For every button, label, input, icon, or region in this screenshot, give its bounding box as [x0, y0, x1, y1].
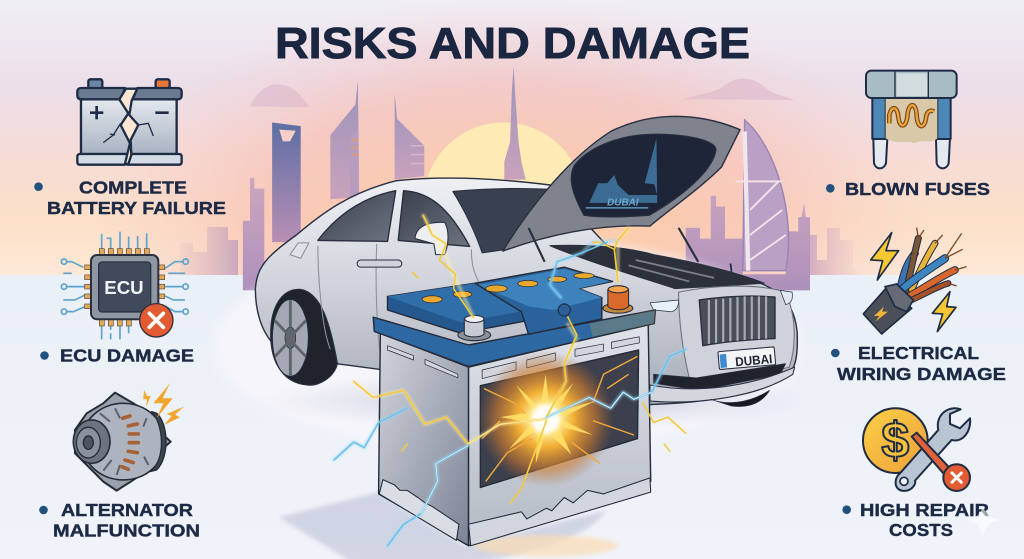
lower intake — [654, 364, 786, 390]
number plate — [718, 347, 776, 370]
clamp — [558, 304, 570, 316]
error badge — [140, 304, 173, 337]
number plate: DUBAI — [735, 351, 773, 369]
explosion burst — [478, 351, 638, 487]
cooling fins — [90, 408, 148, 475]
low skyline — [243, 178, 810, 290]
label: ELECTRICAL — [858, 343, 979, 363]
negative terminal — [458, 315, 491, 341]
wrench — [896, 408, 970, 491]
grille — [699, 296, 775, 346]
label — [47, 178, 226, 218]
item: alternator malfunction — [39, 383, 200, 541]
fuel flap — [290, 243, 309, 258]
label: BATTERY FAILURE — [47, 198, 226, 218]
pale ground glow — [214, 239, 800, 453]
engine bay — [550, 245, 764, 289]
left column — [34, 79, 226, 541]
exploding car battery — [373, 267, 655, 546]
battery plus and minus signs — [90, 106, 169, 119]
label: WIRING DAMAGE — [837, 364, 1006, 384]
white-blue arcs — [334, 242, 686, 546]
label: COSTS — [889, 520, 953, 540]
open bonnet — [503, 116, 740, 283]
item: high repair costs — [842, 408, 989, 540]
label: COMPLETE — [79, 178, 187, 198]
error badge — [943, 464, 970, 491]
burnt filament — [889, 105, 934, 126]
red handle — [912, 433, 950, 473]
Dubai skyline — [243, 66, 810, 290]
distant skyline right — [800, 203, 862, 275]
label: MALFUNCTION — [53, 521, 200, 541]
wires — [900, 238, 955, 300]
watermark sparkle — [966, 505, 1000, 536]
lightning bolts — [871, 233, 956, 332]
positive terminal — [603, 286, 633, 313]
label: BLOWN FUSES — [845, 179, 990, 199]
crack gap — [119, 89, 138, 164]
label: ALTERNATOR — [61, 500, 193, 520]
lid right block — [475, 267, 613, 334]
battery ground shadow — [279, 492, 607, 559]
bonnet emblem — [586, 139, 657, 209]
icon: coin, wrench and cross — [863, 408, 970, 491]
label — [860, 500, 989, 540]
item: ECU damage — [40, 232, 194, 366]
bullet — [34, 182, 43, 191]
bullet — [826, 184, 835, 193]
yellow arcs — [354, 215, 686, 503]
arc glow — [354, 215, 629, 444]
label: HIGH REPAIR — [860, 500, 989, 520]
car body — [255, 178, 797, 405]
radiator surround — [679, 286, 794, 379]
Burj Khalifa — [504, 66, 526, 180]
distant skyline left — [180, 227, 238, 275]
item: complete battery failure — [34, 79, 226, 218]
rear tyre and arch — [271, 289, 338, 385]
windscreen — [453, 189, 550, 253]
clouds — [250, 79, 795, 107]
bonnet struts — [529, 228, 698, 262]
icon: cracked battery — [77, 79, 182, 165]
icon: ECU chip — [61, 232, 188, 339]
wing mirror — [415, 222, 448, 255]
door handle — [357, 260, 402, 267]
skyscraper with aperture — [272, 123, 301, 242]
bonnet emblem: DUBAI — [607, 198, 639, 209]
car ground shadow — [257, 371, 814, 431]
background: sunset sky — [0, 0, 1024, 276]
label: ECU DAMAGE — [60, 346, 194, 366]
item: blown fuses — [826, 71, 990, 199]
item: electrical wiring damage — [831, 228, 1006, 384]
label — [53, 500, 200, 541]
sparks — [143, 383, 184, 425]
dollar sign: $ — [881, 412, 909, 468]
lid rim — [373, 310, 655, 366]
background: pale ground — [0, 275, 1024, 559]
lower bumper — [650, 367, 795, 402]
headlight — [650, 300, 679, 312]
battery left side — [379, 333, 469, 546]
gold caps — [422, 273, 594, 303]
title: RISKS AND DAMAGE — [275, 19, 750, 68]
luxury car — [255, 116, 797, 406]
rear side window — [318, 191, 396, 241]
base foot left — [379, 480, 459, 540]
front side window — [398, 191, 470, 246]
electric arcs — [334, 215, 686, 546]
twisted tower — [330, 81, 359, 199]
orange reflection on ground — [475, 535, 618, 556]
bonnet inner panel with emblem — [571, 134, 716, 217]
cable jacket — [863, 287, 912, 334]
rear wheel rim — [272, 300, 308, 376]
right column — [826, 71, 1006, 540]
base foot front — [469, 478, 651, 546]
Burj Al Arab — [736, 120, 789, 271]
ECU text: ECU — [104, 277, 144, 298]
lid left block — [388, 283, 530, 333]
central scene — [214, 66, 814, 559]
battery front side — [469, 324, 651, 546]
inspection window — [480, 350, 639, 488]
bullet — [842, 505, 851, 514]
door seams — [318, 244, 479, 367]
bullet — [39, 506, 48, 514]
front tyre — [711, 390, 770, 406]
bullet — [40, 351, 49, 360]
icon: frayed wires — [863, 228, 967, 334]
vents — [388, 337, 639, 379]
icon: alternator — [73, 383, 184, 491]
label — [837, 343, 1006, 384]
frayed ends — [910, 228, 967, 286]
sun — [423, 123, 584, 283]
icon: blown fuse — [866, 71, 957, 168]
bullet — [831, 349, 840, 357]
stepped tower — [395, 94, 424, 180]
coin — [863, 408, 928, 473]
